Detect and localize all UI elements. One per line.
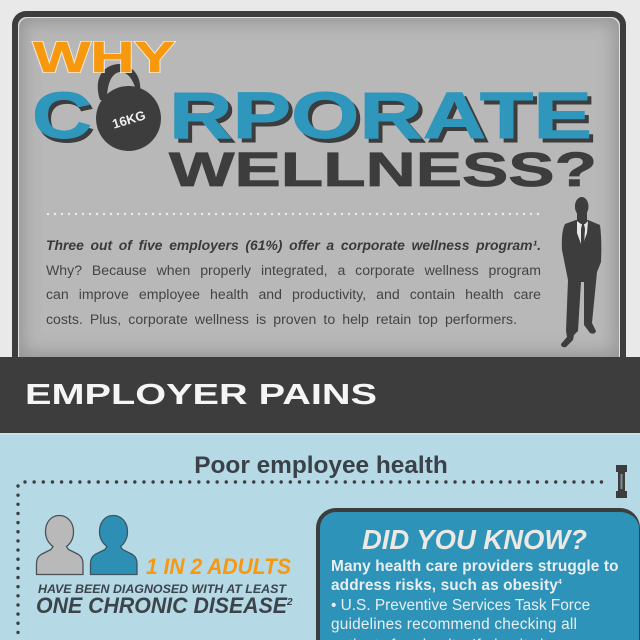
heading: poor employee health: Poor employee health	[194, 452, 448, 479]
text block: intro paragraph: Three out of five employers (61%) offer a corporate wellness program¹.	[46, 237, 541, 253]
heading: corporate: RPORATE	[169, 78, 592, 152]
heading: wellness: WELLNESS?	[169, 144, 597, 197]
text block: did you know body	[331, 558, 619, 640]
text block: did you know body: Many health care providers struggle to	[331, 558, 619, 575]
icon: dumbbell	[616, 465, 627, 498]
panel: poor employee health	[0, 433, 640, 640]
text block: did you know body: address risks, such as obesity4	[331, 577, 562, 594]
heading: did you know: DID YOU KNOW?	[362, 524, 587, 555]
panel: intro	[12, 11, 626, 363]
heading: why: WHY	[33, 33, 175, 82]
icon: kettlebell: 16KG	[110, 107, 147, 132]
stat: 1 in 2 adults: 2	[286, 597, 293, 608]
heading: corporate: C	[35, 82, 95, 156]
text block: intro paragraph: can improve employee health and productivity, and contain health care	[46, 286, 541, 302]
text block: did you know body: guidelines recommend checking all	[331, 616, 577, 633]
icon: blue adult	[90, 516, 137, 574]
icon: businessman silhouette	[561, 197, 602, 348]
stat: 1 in 2 adults: HAVE BEEN DIAGNOSED WITH AT LEAST	[38, 582, 287, 596]
title	[31, 33, 597, 197]
callout: did you know	[316, 508, 640, 640]
heading: why: WHY	[33, 33, 175, 82]
stat: 1 in 2 adults: 1 IN 2 ADULTS	[146, 554, 291, 579]
dotted frame with dumbbell	[16, 465, 627, 634]
heading: corporate	[32, 78, 596, 156]
heading: corporate: C	[32, 78, 92, 152]
divider: dots	[46, 212, 540, 216]
stat: 1 in 2 adults	[36, 554, 293, 618]
heading: corporate: RPORATE	[173, 82, 596, 156]
icon: two adults	[36, 514, 138, 576]
text block: intro paragraph: Why? Because when properly integrated, a corporate wellness program	[46, 262, 541, 278]
text block: intro paragraph: costs. Plus, corporate wellness is proven to help retain top performers.	[46, 311, 517, 327]
section band: employer pains	[0, 357, 640, 433]
text block: intro paragraph	[46, 237, 541, 327]
icon: grey adult	[36, 516, 83, 574]
section band: employer pains: EMPLOYER PAINS	[25, 379, 377, 411]
stat: 1 in 2 adults: ONE CHRONIC DISEASE	[36, 593, 288, 618]
text block: did you know body: • U.S. Preventive Services Task Force	[331, 596, 590, 614]
icon: kettlebell	[96, 64, 161, 151]
